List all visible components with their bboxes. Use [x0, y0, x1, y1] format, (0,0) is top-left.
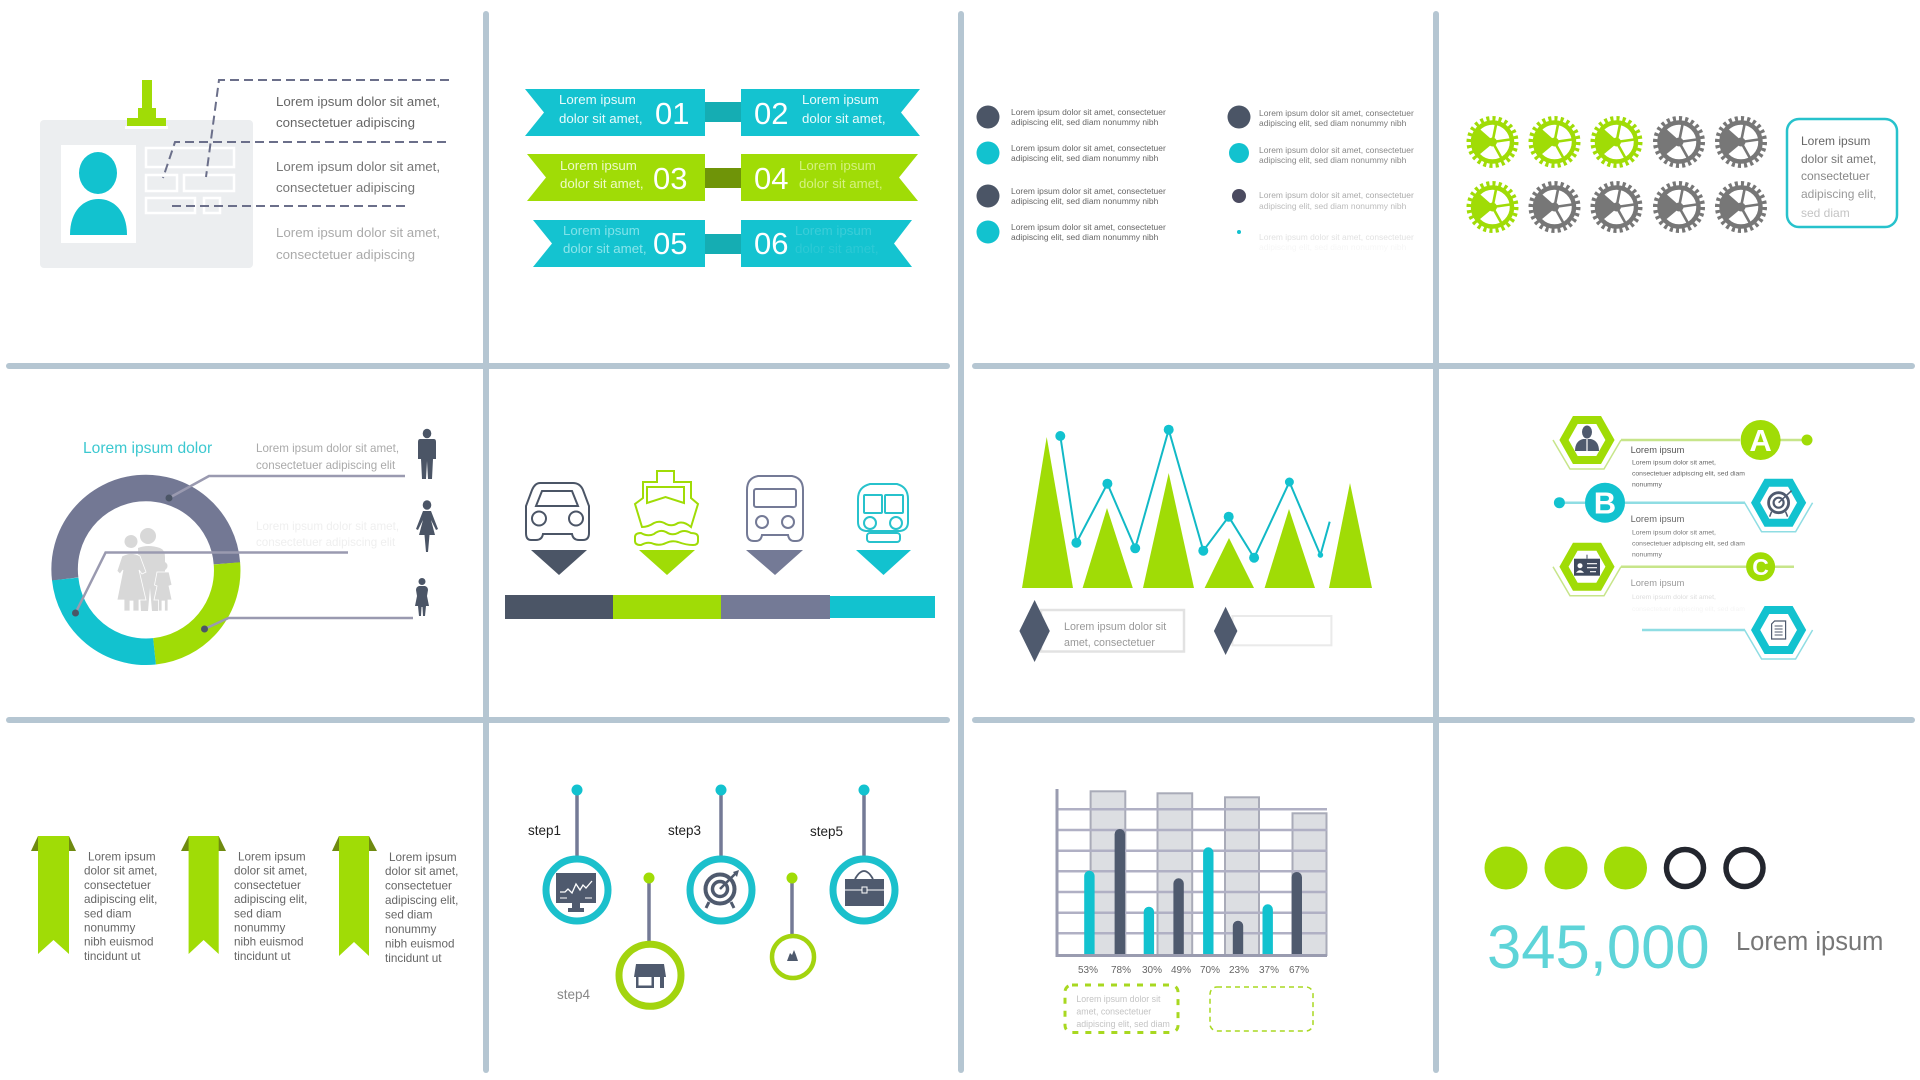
icon: child	[415, 578, 429, 616]
bullet text column 2: adipiscing elit, sed diam nonummy nibh	[1259, 155, 1407, 165]
icon: bus	[747, 476, 803, 541]
badge C: C	[1752, 554, 1769, 580]
icon: man	[418, 429, 436, 479]
text blocks: Lorem ipsum dolor sit amet,	[1632, 460, 1716, 466]
bookmark 2: nibh euismod	[234, 936, 304, 948]
value: 345,000	[1487, 913, 1710, 982]
bullet text column 2	[1259, 108, 1414, 252]
panel: family donut	[65, 429, 438, 652]
bookmark 2: consectetuer	[234, 879, 301, 892]
percent labels: 70%	[1200, 965, 1220, 976]
chart background columns	[1091, 791, 1326, 955]
hexagon: document	[1745, 610, 1813, 659]
ribbons row 1: Lorem ipsum	[802, 92, 879, 107]
chart bars	[1084, 829, 1302, 954]
bookmark 1: consectetuer	[84, 879, 151, 892]
callout dots	[72, 494, 208, 632]
bookmark 1: Lorem ipsum	[88, 850, 156, 864]
bookmark 1: tincidunt ut	[84, 950, 141, 963]
step labels: step4	[557, 986, 590, 1002]
icon: woman	[416, 500, 438, 552]
bullet dots column 2	[1228, 106, 1250, 234]
text blocks: Lorem ipsum dolor sit amet,	[256, 442, 399, 455]
text blocks: Lorem ipsum	[1631, 514, 1685, 524]
text blocks: Lorem ipsum dolor sit amet,	[1632, 594, 1716, 601]
chart axes	[1057, 789, 1327, 956]
panel: numbered ribbons	[525, 89, 920, 267]
bookmark 1: sed diam	[84, 908, 131, 920]
bookmark 2	[181, 836, 307, 963]
bookmark 3: consectetuer	[385, 880, 452, 892]
ribbons row 1: dolor sit amet,	[802, 111, 886, 126]
bullet text column 2: adipiscing elit, sed diam nonummy nibh	[1259, 201, 1407, 211]
ribbons row 2: 03	[653, 161, 687, 196]
text box	[1787, 119, 1897, 227]
panel: transport	[505, 471, 935, 619]
bookmark 1: adipiscing elit,	[84, 893, 157, 906]
bullet text column 1: adipiscing elit, sed diam nonummy nibh	[1011, 196, 1159, 206]
bookmark 3: nonummy	[385, 923, 436, 936]
bullet dots column 1	[976, 106, 1000, 244]
percent labels: 78%	[1111, 965, 1131, 976]
bookmark 1: dolor sit amet,	[84, 864, 157, 878]
heading: Lorem ipsum dolor	[83, 440, 212, 457]
panel: bookmarks	[31, 836, 458, 965]
text blocks: nonummy	[1632, 552, 1662, 558]
bullet text column 2: Lorem ipsum dolor sit amet, consectetuer	[1259, 108, 1414, 118]
bookmark 1: nonummy	[84, 922, 135, 934]
ribbons row 2: Lorem ipsum	[560, 158, 637, 173]
callout lines	[76, 476, 413, 629]
pointer triangles	[531, 550, 911, 575]
text blocks: Lorem ipsum	[1631, 445, 1685, 455]
text blocks: consectetuer adipiscing elit, sed diam	[1632, 606, 1745, 613]
ribbons row 3	[533, 220, 912, 267]
text box: adipiscing elit,	[1801, 187, 1876, 201]
bullet text column 1: adipiscing elit, sed diam nonummy nibh	[1011, 153, 1159, 163]
text block: callouts: consectetuer adipiscing	[276, 180, 415, 195]
bullet text column 2: Lorem ipsum dolor sit amet, consectetuer	[1259, 190, 1414, 200]
badge A: A	[1749, 423, 1772, 458]
ribbons row 1: 02	[754, 96, 788, 131]
bullet text column 2: Lorem ipsum dolor sit amet, consectetuer	[1259, 232, 1414, 242]
connector lines	[1559, 440, 1807, 630]
bookmark 2: adipiscing elit,	[234, 893, 307, 906]
rating dots	[1484, 846, 1763, 890]
bookmark 1: nibh euismod	[84, 936, 154, 948]
percent labels: 67%	[1289, 965, 1309, 976]
percent labels: 53%	[1078, 965, 1098, 976]
panel: id badge	[40, 80, 449, 268]
text block: callouts: consectetuer adipiscing	[276, 115, 415, 130]
bookmark 3: nibh euismod	[385, 938, 455, 950]
donut chart	[65, 488, 227, 652]
text block: callouts: Lorem ipsum dolor sit amet,	[276, 159, 440, 174]
badge B	[1554, 483, 1625, 523]
dashed note 1: adipiscing elit, sed diam	[1076, 1019, 1170, 1029]
icon: car	[526, 483, 589, 540]
line series	[1055, 425, 1330, 563]
legend item 1	[1019, 600, 1184, 662]
chart grid	[1057, 809, 1327, 933]
percent labels	[1078, 965, 1309, 976]
bookmark 3: dolor sit amet,	[385, 865, 458, 878]
ribbons row 2: Lorem ipsum	[799, 158, 876, 173]
ribbons row 3: 06	[754, 226, 788, 261]
step 5 pin	[833, 784, 895, 921]
text box: sed diam	[1801, 206, 1850, 220]
caption: Lorem ipsum	[1736, 928, 1883, 956]
callout lines	[163, 80, 449, 206]
icon: id card	[40, 80, 253, 268]
panel: big number	[1484, 846, 1883, 982]
step 3 pin	[690, 784, 752, 921]
ribbons row 3: Lorem ipsum	[563, 223, 640, 238]
bullet text column 2: adipiscing elit, sed diam nonummy nibh	[1259, 118, 1407, 128]
hexagon: target	[1745, 483, 1813, 532]
ribbons row 1: 01	[655, 96, 689, 131]
stacked bar	[505, 595, 935, 619]
dashed note 1	[1065, 985, 1178, 1032]
ribbons row 1: Lorem ipsum	[559, 92, 636, 107]
legend item 2	[1214, 607, 1331, 655]
panel: bullet list	[976, 106, 1414, 252]
bookmark 2: Lorem ipsum	[238, 850, 306, 864]
bookmark 2: tincidunt ut	[234, 950, 291, 963]
bookmark 3: adipiscing elit,	[385, 894, 458, 907]
text blocks: Lorem ipsum dolor sit amet,	[1632, 530, 1716, 536]
legend item 1: Lorem ipsum dolor sit	[1064, 621, 1166, 633]
small pin	[772, 872, 814, 978]
step labels: step1	[528, 822, 561, 838]
step 1 pin	[546, 784, 608, 921]
text blocks: Lorem ipsum	[1631, 578, 1685, 588]
percent labels: 49%	[1171, 965, 1191, 976]
text box: Lorem ipsum	[1801, 134, 1870, 148]
gear rating icons	[1469, 118, 1764, 230]
step labels	[528, 822, 843, 1002]
ribbons row 2: dolor sit amet,	[560, 176, 644, 191]
text block: callouts: Lorem ipsum dolor sit amet,	[276, 225, 440, 240]
dashed note 2	[1210, 987, 1313, 1031]
bookmark 2: sed diam	[234, 908, 281, 920]
text blocks: consectetuer adipiscing elit	[256, 459, 396, 472]
step labels: step3	[668, 822, 701, 838]
bullet text column 1: Lorem ipsum dolor sit amet, consectetuer	[1011, 186, 1166, 196]
bullet text column 1: Lorem ipsum dolor sit amet, consectetuer	[1011, 222, 1166, 232]
bookmark 2: nonummy	[234, 922, 285, 934]
badge B: B	[1594, 486, 1616, 520]
ribbons row 3: dolor sit amet,	[795, 241, 879, 256]
badge A	[1741, 420, 1812, 460]
panel: hexagon process	[1553, 420, 1813, 659]
text blocks: consectetuer adipiscing elit	[256, 536, 396, 549]
bullet text column 1: adipiscing elit, sed diam nonummy nibh	[1011, 232, 1159, 242]
ribbons row 1: dolor sit amet,	[559, 111, 643, 126]
panel: bar chart	[1057, 789, 1327, 1032]
text block: callouts	[276, 94, 440, 262]
text blocks	[1631, 445, 1745, 613]
ribbons row 3: dolor sit amet,	[563, 241, 647, 256]
text block: callouts: Lorem ipsum dolor sit amet,	[276, 94, 440, 109]
bookmark 2: dolor sit amet,	[234, 864, 307, 878]
panel: gears	[1469, 118, 1897, 230]
text blocks: consectetuer adipiscing elit, sed diam	[1632, 540, 1745, 548]
step labels: step5	[810, 823, 843, 839]
bookmark 3: Lorem ipsum	[389, 851, 457, 864]
ribbons row 3: Lorem ipsum	[795, 223, 872, 238]
dashed note 1: amet, consectetuer	[1076, 1006, 1151, 1016]
ribbons row 2: dolor sit amet,	[799, 176, 883, 191]
icon: family	[117, 528, 172, 611]
dashed note 1: Lorem ipsum dolor sit	[1076, 994, 1161, 1004]
ribbons row 2	[527, 154, 918, 201]
bookmark 3: sed diam	[385, 908, 432, 922]
bullet text column 2: Lorem ipsum dolor sit amet, consectetuer	[1259, 145, 1414, 155]
step 4 pin	[619, 872, 681, 1006]
percent labels: 37%	[1259, 965, 1279, 976]
text blocks	[256, 442, 399, 549]
percent labels: 23%	[1229, 965, 1249, 976]
ribbons row 3: 05	[653, 226, 687, 261]
text blocks: consectetuer adipiscing elit, sed diam	[1632, 470, 1745, 478]
text blocks: Lorem ipsum dolor sit amet,	[256, 520, 399, 533]
triangle columns	[1022, 437, 1372, 588]
text box: dolor sit amet,	[1801, 152, 1876, 166]
bullet text column 2: adipiscing elit, sed diam nonummy nibh	[1259, 242, 1407, 252]
icon: train	[858, 484, 908, 542]
panel: triangle line chart	[1019, 425, 1372, 662]
bookmark 3	[332, 836, 458, 965]
legend item 1: amet, consectetuer	[1064, 637, 1155, 649]
text block: callouts: consectetuer adipiscing	[276, 247, 415, 262]
hexagon: person	[1553, 420, 1621, 469]
percent labels: 30%	[1142, 965, 1162, 976]
bookmark 3: tincidunt ut	[385, 952, 442, 965]
icon: boat	[635, 471, 698, 545]
text blocks: nonummy	[1632, 482, 1662, 488]
ribbons row 2: 04	[754, 161, 788, 196]
bullet text column 1: adipiscing elit, sed diam nonummy nibh	[1011, 117, 1159, 127]
bullet text column 1	[1011, 107, 1166, 242]
badge C	[1746, 552, 1775, 581]
hexagon: id card	[1553, 547, 1621, 596]
panel: steps	[528, 784, 895, 1006]
bookmark 1	[31, 836, 157, 963]
bullet text column 1: Lorem ipsum dolor sit amet, consectetuer	[1011, 143, 1166, 153]
text box: consectetuer	[1801, 169, 1870, 183]
ribbons row 1	[525, 89, 920, 136]
bullet text column 1: Lorem ipsum dolor sit amet, consectetuer	[1011, 107, 1166, 117]
